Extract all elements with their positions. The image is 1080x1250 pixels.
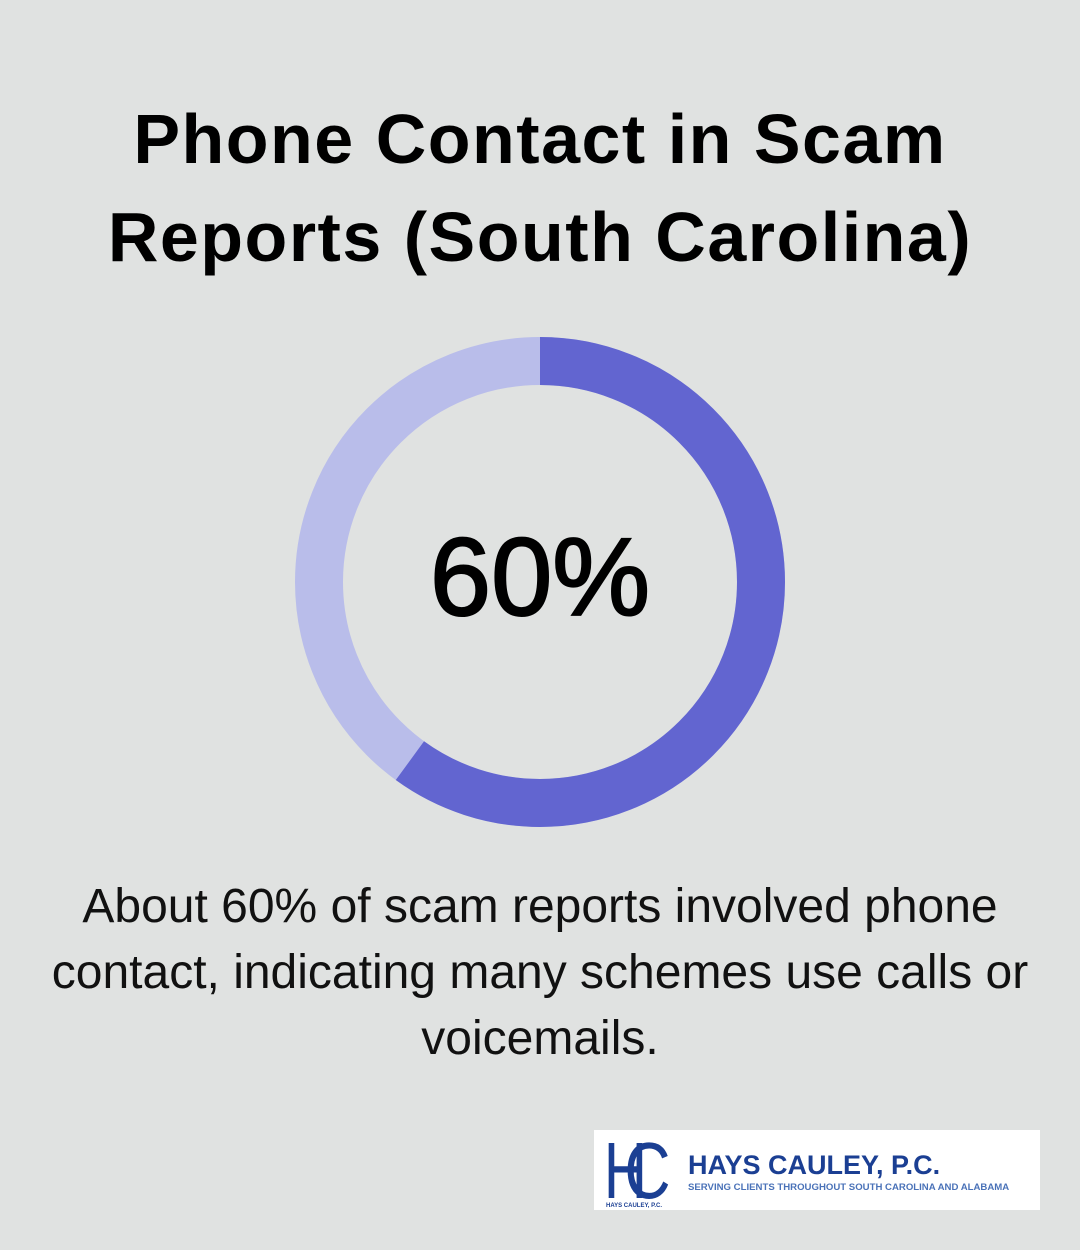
description text: About 60% of scam reports involved phone contact, indicating many schemes use calls or voicemails. bbox=[52, 880, 1028, 1065]
logo: HAYS CAULEY, P.C. bbox=[606, 1203, 662, 1209]
logo: SERVING CLIENTS THROUGHOUT SOUTH CAROLINA AND ALABAMA bbox=[688, 1182, 1009, 1193]
logo: HAYS CAULEY, P.C. bbox=[688, 1150, 940, 1180]
title: Reports (South Carolina) bbox=[108, 198, 972, 276]
donut chart: 60% bbox=[430, 516, 650, 639]
logo bbox=[594, 1130, 1040, 1210]
title bbox=[108, 100, 972, 276]
title: Phone Contact in Scam bbox=[133, 100, 947, 178]
